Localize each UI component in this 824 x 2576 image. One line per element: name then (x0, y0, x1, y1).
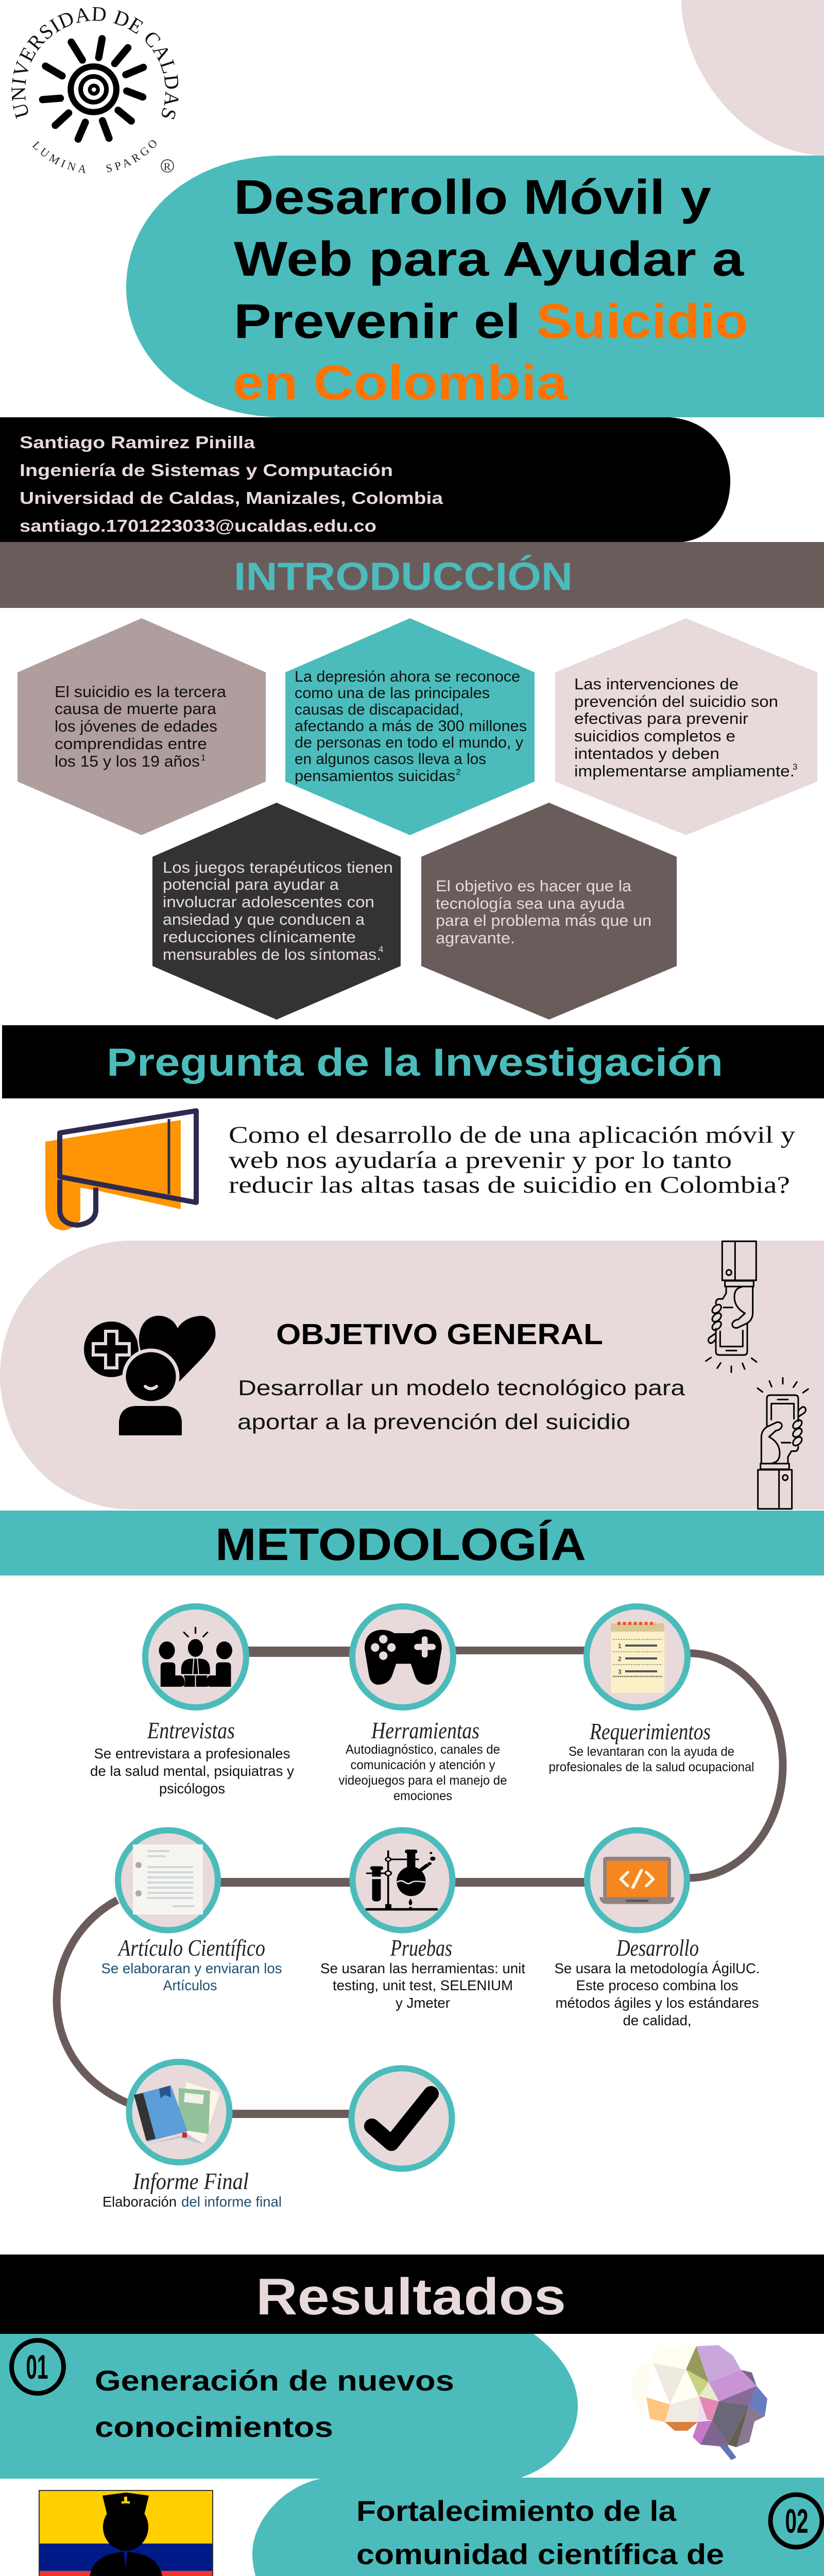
title text: Desarrollo Móvil y (234, 170, 711, 225)
icon: low poly brain (630, 2345, 767, 2460)
description: Se usara la metodología ÁgilUC. (554, 1960, 760, 1976)
icon: paper document (133, 1844, 203, 1914)
hexagon 3 (555, 618, 817, 835)
description: del informe final (181, 2194, 282, 2210)
number 01 (11, 2340, 64, 2394)
description (102, 2194, 282, 2210)
description: Artículos (163, 1977, 217, 1993)
process connectors (57, 1647, 783, 2118)
description (554, 1960, 760, 2028)
author details: Universidad de Caldas, Manizales, Colombia (20, 488, 443, 507)
description: Este proceso combina los (576, 1977, 739, 1993)
hexagon 4: Los juegos terapéuticos tienen (163, 858, 393, 876)
research question text: Como el desarrollo de de una aplicación móvil y (229, 1122, 796, 1148)
hexagon 2: 2 (456, 767, 460, 777)
step: Herramientas (339, 1606, 507, 1803)
icon: interview people (159, 1628, 232, 1687)
hexagon 1 (18, 618, 266, 835)
title text: en Colombia (233, 355, 568, 410)
icon: notepad: 2 (618, 1655, 622, 1663)
hexagon 3: Las intervenciones de (574, 675, 739, 693)
step: Informe Final (102, 2062, 282, 2210)
description: Autodiagnóstico, canales de (346, 1742, 500, 1757)
result text: conocimientos (95, 2411, 333, 2443)
icon: hand holding phone, top (706, 1241, 757, 1372)
icon: check mark (372, 2094, 431, 2143)
description: emociones (393, 1789, 452, 1803)
description: Se levantaran con la ayuda de (569, 1744, 734, 1759)
description: y Jmeter (396, 1995, 450, 2011)
heading: Metodología: METODOLOGÍA (215, 1519, 586, 1570)
title panel (126, 156, 824, 417)
result text: Fortalecimiento de la (356, 2495, 677, 2527)
icon: Colombian flag with nurse (39, 2490, 213, 2576)
description: videojuegos para el manejo de (339, 1773, 507, 1788)
label: Informe Final (132, 2168, 249, 2194)
description: de la salud mental, psiquiatras y (90, 1763, 294, 1779)
objective heading: OBJETIVO GENERAL (276, 1318, 603, 1351)
hexagon 1: 1 (201, 753, 205, 762)
description: Elaboración (102, 2194, 177, 2210)
hexagon 1: El suicidio es la tercera (55, 683, 227, 701)
hexagon 3: prevención del suicidio son (574, 692, 778, 710)
icon: books (134, 2082, 220, 2144)
title text: Web para Ayudar a (234, 232, 744, 286)
hexagon 5: El objetivo es hacer que la (436, 877, 632, 895)
hexagon 3: implementarse ampliamente. (574, 762, 795, 780)
result text (95, 2364, 454, 2443)
title text (233, 170, 748, 410)
decorative pink corner shape (681, 0, 824, 156)
icon: notepad: 1 (618, 1642, 622, 1650)
label: Herramientas (371, 1717, 479, 1743)
number 02: 02 (785, 2502, 809, 2540)
hexagon 1: causa de muerte para (55, 700, 217, 718)
description (90, 1745, 294, 1797)
result text: comunidad científica de (356, 2538, 724, 2570)
result text: Generación de nuevos (95, 2364, 454, 2397)
icon: game controller (365, 1629, 442, 1685)
number 01: 01 (26, 2348, 48, 2386)
hexagon 2 (285, 618, 535, 835)
hexagon 2: causas de discapacidad, (295, 701, 464, 718)
title text: Suicidio (536, 294, 748, 349)
step: Pruebas (320, 1830, 525, 2011)
hexagon 2: pensamientos suicidas (295, 768, 455, 785)
label: Entrevistas (147, 1717, 235, 1743)
label: Desarrollo (616, 1935, 699, 1961)
result text (356, 2495, 724, 2576)
step: Entrevistas (90, 1606, 294, 1797)
objective text: Desarrollar un modelo tecnológico para (238, 1376, 685, 1400)
author details: Ingeniería de Sistemas y Computación (20, 461, 393, 480)
hexagon 4 (152, 803, 401, 1020)
hexagon 3: efectivas para prevenir (574, 709, 748, 727)
description (339, 1742, 507, 1803)
heading: Introducción (0, 542, 824, 608)
research question text: web nos ayudaría a prevenir y por lo tanto (229, 1147, 732, 1174)
title text: Prevenir el (234, 294, 521, 349)
description (549, 1744, 754, 1774)
logo: Universidad de Caldas (11, 7, 179, 173)
panel: objetivo general (0, 1241, 824, 1510)
label: Requerimientos (589, 1718, 711, 1744)
hexagon 3: intentados y deben (574, 744, 719, 762)
heading: Resultados: Resultados (256, 2268, 566, 2326)
hexagon 4: mensurables de los síntomas. (163, 945, 381, 963)
heading: Pregunta de la Investigación (2, 1025, 824, 1098)
research question text: reducir las altas tasas de suicidio en Colombia? (229, 1172, 790, 1198)
hexagon 3: 3 (793, 762, 797, 772)
label: Artículo Científico (117, 1935, 265, 1961)
heading: Metodología (0, 1511, 824, 1575)
icon: health and heart person (84, 1315, 216, 1435)
icon: laptop with code (599, 1857, 675, 1904)
hexagon 4: involucrar adolescentes con (163, 893, 374, 911)
hexagon 1: los jóvenes de edades (55, 717, 217, 735)
logo: Universidad de Caldas: R (164, 161, 171, 173)
hexagon 1: los 15 y los 19 años (55, 752, 200, 770)
author details: Santiago Ramirez Pinilla (20, 433, 255, 452)
hexagon 4: 4 (379, 944, 383, 954)
hexagon 5: tecnología sea una ayuda (436, 894, 625, 912)
result 01 panel (0, 2334, 578, 2479)
description: Se usaran las herramientas: unit (320, 1960, 525, 1976)
icon: notepad (611, 1623, 664, 1693)
hexagon 5 (421, 803, 677, 1020)
number 02 (770, 2495, 822, 2547)
hexagon 2: La depresión ahora se reconoce (295, 668, 520, 685)
description: de calidad, (623, 2012, 691, 2028)
description: métodos ágiles y los estándares (555, 1995, 759, 2011)
hexagon 5: para el problema más que un (436, 911, 651, 929)
author details (20, 433, 443, 535)
step: Requerimientos (549, 1606, 754, 1774)
hexagon 5: agravante. (436, 929, 515, 947)
step: Desarrollo (554, 1830, 760, 2028)
heading: Resultados (0, 2255, 824, 2334)
description: psicólogos (159, 1781, 225, 1797)
description: profesionales de la salud ocupacional (549, 1760, 754, 1774)
hexagon 3: suicidios completos e (574, 727, 735, 745)
step: completion check (351, 2068, 452, 2169)
objective text (237, 1376, 685, 1434)
description: Se entrevistara a profesionales (94, 1745, 290, 1761)
hexagon 2: como una de las principales (295, 685, 490, 702)
objective text: aportar a la prevención del suicidio (237, 1410, 630, 1434)
result 02 panel (252, 2478, 824, 2576)
label: Pruebas (390, 1935, 452, 1961)
hexagon 1: comprendidas entre (55, 735, 207, 753)
author details: santiago.1701223033@ucaldas.edu.co (20, 516, 376, 535)
description: Se elaboraran y enviaran los (101, 1960, 282, 1976)
description (320, 1960, 525, 2011)
heading: Introducción: INTRODUCCIÓN (234, 555, 573, 599)
description (101, 1960, 282, 1993)
description: comunicación y atención y (350, 1758, 495, 1772)
author panel (0, 417, 730, 542)
logo: Universidad de Caldas: LUMINA SPARGO (32, 140, 157, 173)
hexagon 4: ansiedad y que conducen a (163, 910, 365, 928)
hexagon 2: de personas en todo el mundo, y (295, 734, 523, 751)
icon: megaphone (45, 1111, 196, 1230)
icon: lab flask (367, 1850, 436, 1909)
step: Artículo Científico (101, 1830, 282, 1993)
logo: Universidad de Caldas: UNIVERSIDAD DE CALDAS (11, 7, 179, 120)
hexagon 4: reducciones clínicamente (163, 928, 356, 946)
description: testing, unit test, SELENIUM (333, 1977, 513, 1993)
heading: Pregunta de la Investigación: Pregunta de la Investigación (107, 1041, 723, 1084)
icon: hand holding phone, bottom (758, 1378, 808, 1509)
hexagon 2: en algunos casos lleva a los (295, 751, 486, 768)
icon: notepad: 3 (618, 1668, 622, 1675)
hexagon 2: afectando a más de 300 millones (295, 718, 527, 735)
hexagon 4: potencial para ayudar a (163, 875, 339, 893)
research question text (229, 1122, 796, 1198)
